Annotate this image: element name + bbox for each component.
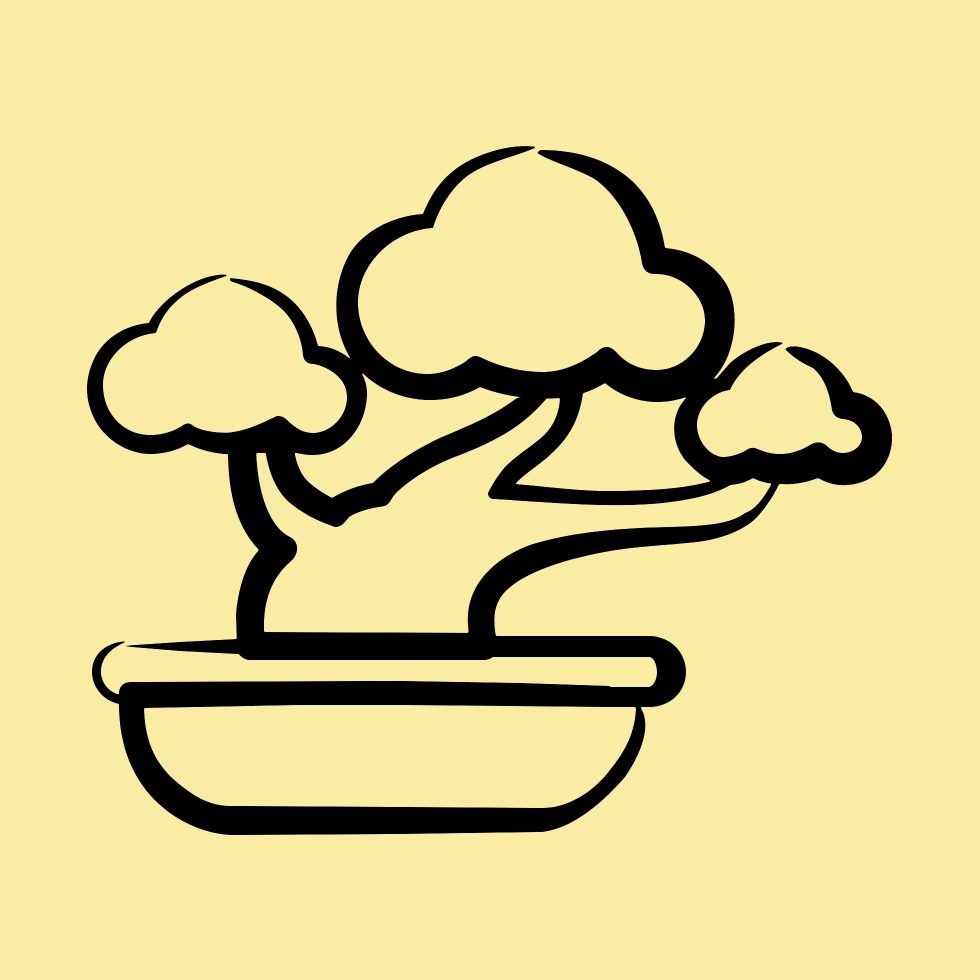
pot body [119, 704, 645, 835]
lower branch stroke [468, 481, 780, 637]
trunk base band [238, 632, 495, 660]
pot rim thin left stroke [120, 639, 238, 654]
upper branch stroke [265, 398, 547, 527]
pot lower rim band [119, 681, 610, 708]
pot rim right end [490, 636, 686, 707]
left trunk stroke [228, 450, 297, 645]
icon: bonsai tree in pot [87, 146, 892, 835]
pot rim left arc [92, 641, 128, 704]
large foliage cloud [336, 146, 735, 402]
right foliage cloud [674, 342, 892, 485]
left foliage cloud [87, 275, 367, 455]
right trunk fork stroke [488, 393, 732, 505]
